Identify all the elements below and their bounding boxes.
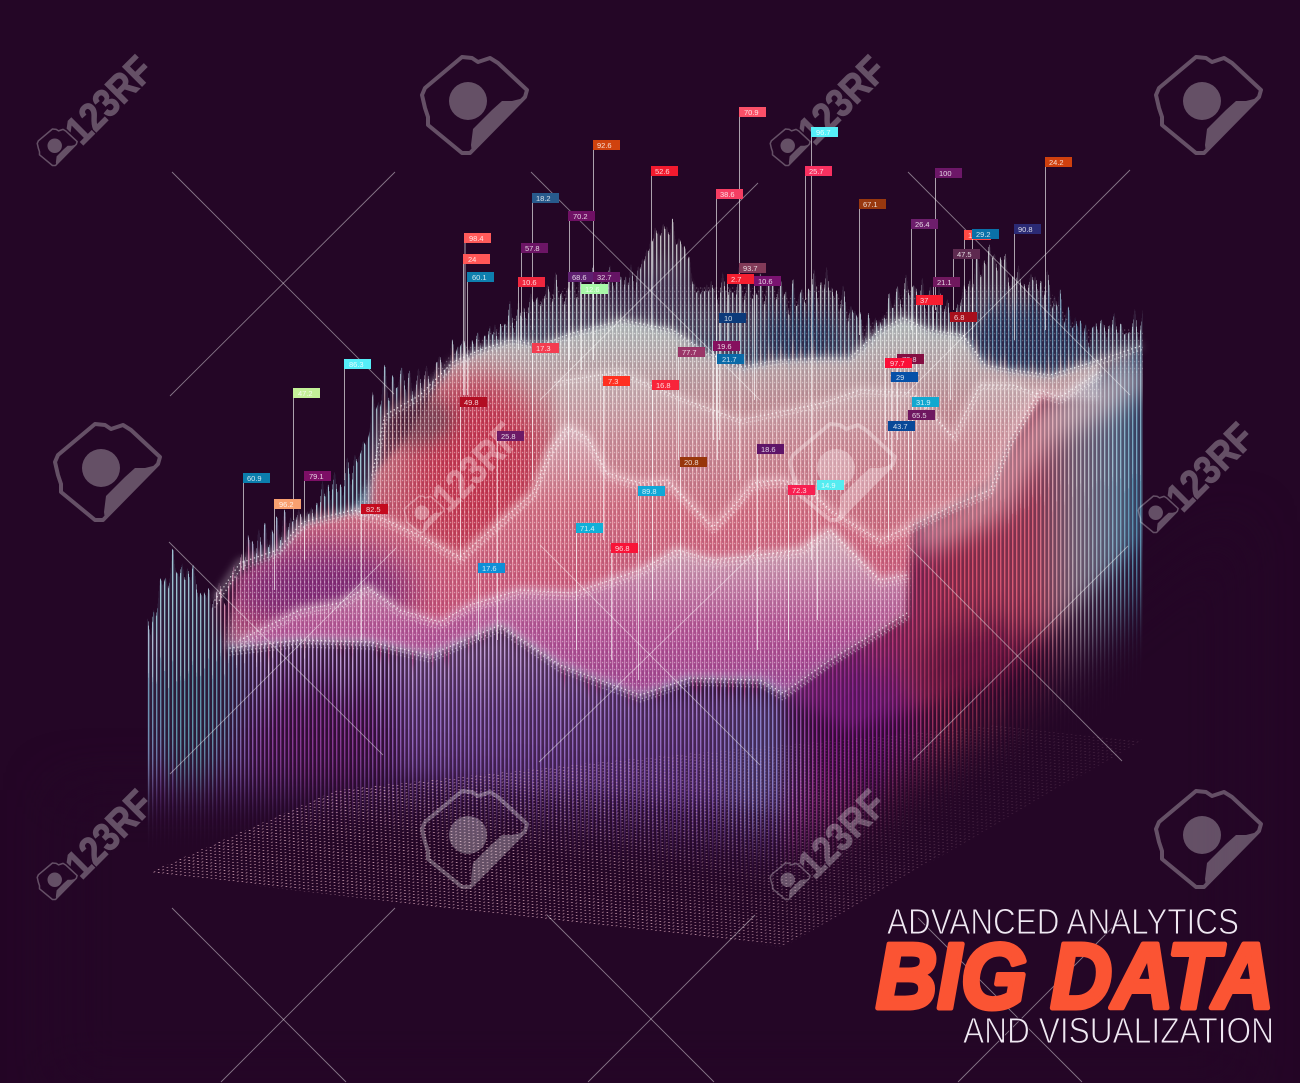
flag 38.6 (716, 189, 743, 420)
flag 29 (891, 372, 918, 470)
flag 97.7: 97.7 (890, 359, 905, 368)
watermark egg icon 5 (422, 791, 527, 887)
flag 20.8 (680, 457, 707, 600)
watermark text 2: 123RF (790, 48, 895, 153)
flag 90.8 (1014, 224, 1041, 340)
flag 93.7 (739, 263, 766, 273)
ridge highlights (215, 318, 1145, 702)
flag 18.6 (757, 444, 784, 650)
flag 57.8: 57.8 (525, 244, 540, 253)
flag 92.6: 92.6 (597, 141, 612, 150)
title: big data: BIG DATA (876, 924, 1274, 1028)
flag 89.8: 89.8 (642, 487, 657, 496)
flag 7.3: 7.3 (608, 377, 618, 386)
upper spike dots (430, 285, 1143, 375)
flag 25.8 (497, 431, 524, 640)
flag 67.1: 67.1 (863, 200, 878, 209)
flag 70.9 (739, 107, 766, 480)
flag 10.6 right: 10.6 (758, 277, 773, 286)
flag 65.5: 65.5 (912, 411, 927, 420)
watermark text 1 (37, 48, 162, 165)
flag 21.7: 21.7 (722, 355, 737, 364)
flag 60.1: 60.1 (472, 273, 487, 282)
flag 16.8: 16.8 (656, 381, 671, 390)
flag 77.7 (678, 347, 705, 460)
flag 60.9 (243, 473, 270, 570)
flag 78.8 (897, 354, 924, 440)
flag cyan lower: 14.9 (821, 481, 836, 490)
flag 32.7: 32.7 (597, 273, 612, 282)
flag 38.6: 38.6 (720, 190, 735, 199)
flag 100 (935, 168, 962, 310)
flag 43.7: 43.7 (893, 422, 908, 431)
flag cyan lower (817, 480, 844, 620)
flag 100: 100 (939, 169, 952, 178)
flag 10: 10 (724, 314, 732, 323)
flag 68.6 (568, 272, 595, 480)
watermark egg icon 2 (1156, 57, 1261, 153)
watermark text 3 (404, 415, 529, 532)
flag 29.2 (972, 229, 999, 340)
flag 26.4: 26.4 (915, 220, 930, 229)
title block (876, 901, 1274, 1051)
flag 89.8 (638, 486, 665, 680)
flag 37 (916, 295, 943, 380)
watermark egg icon 6 (1156, 791, 1261, 887)
flag 78.8: 78.8 (902, 355, 917, 364)
flag 93.7: 93.7 (743, 264, 758, 273)
flag 29: 29 (896, 373, 904, 382)
flag 43.7 (888, 421, 915, 540)
flag 19.6 (713, 341, 740, 440)
flag cyan top (811, 127, 838, 560)
watermark text 5: 123RF (57, 782, 162, 887)
flag 47.5: 47.5 (957, 250, 972, 259)
flag 70.2: 70.2 (573, 212, 588, 221)
fade to floor (60, 520, 1240, 1083)
flag 31.9: 31.9 (916, 398, 931, 407)
flag 16.8 (652, 380, 679, 600)
flag 71.4 (576, 523, 603, 650)
flag 10.6 left: 10.6 (522, 278, 537, 287)
flag 6.8 (950, 312, 977, 400)
flag 90.8: 90.8 (1018, 225, 1033, 234)
watermark text 5 (37, 782, 162, 899)
flag 98.4 (464, 233, 491, 395)
flag 65.5 (908, 410, 935, 500)
solid surface (222, 255, 1143, 812)
flag 17.6 (478, 563, 505, 640)
flag green: 12.6 (585, 285, 600, 294)
flag lime (293, 388, 320, 520)
flag 97.7 (885, 358, 912, 440)
flag orange: 96.2 (279, 500, 294, 509)
flag 72.3 (788, 485, 815, 640)
watermark text 4: 123RF (1158, 415, 1263, 520)
flag 10 (719, 313, 746, 440)
flag 10.6 right (754, 276, 781, 400)
flag 37: 37 (920, 296, 928, 305)
flag orange (274, 499, 301, 590)
flag 60.1 (467, 272, 494, 395)
flag 25.8: 25.8 (501, 432, 516, 441)
watermark egg icon 1 (422, 57, 527, 153)
flag 24.2 (1045, 157, 1072, 330)
watermark logos (37, 48, 1263, 899)
watermark egg icon 4 (790, 424, 895, 520)
flag 25.7 (805, 166, 832, 300)
flag 31.9 (912, 397, 939, 480)
flag 21.7 (717, 354, 744, 460)
flag 2.7 (727, 274, 754, 350)
flag 24 (463, 254, 490, 395)
flag green (581, 284, 608, 370)
data flags (243, 107, 1072, 680)
flag 2.7: 2.7 (731, 275, 741, 284)
flag 17: 17 (968, 231, 976, 240)
flag 49.8: 49.8 (464, 398, 479, 407)
flag 52.6 (651, 166, 678, 330)
flag 79.1 (304, 471, 331, 560)
flag 70.9: 70.9 (744, 108, 759, 117)
flag cyan upper left (344, 359, 371, 480)
flag 17 (964, 230, 991, 350)
flag 47.5 (953, 249, 980, 310)
striped spiky bars (147, 218, 1143, 878)
flag 18.2: 18.2 (536, 194, 551, 203)
crosshair diagonal lines (169, 170, 1130, 1082)
watermark text 1: 123RF (57, 48, 162, 153)
watermark text 2 (770, 48, 895, 165)
flag 82.5: 82.5 (366, 505, 381, 514)
flag 57.8 (521, 243, 548, 340)
flag 32.7 (593, 272, 620, 360)
watermark egg icon 3 (55, 424, 160, 520)
flag 7.3 (603, 376, 630, 540)
flag 72.3: 72.3 (792, 486, 807, 495)
flag 18.2 (532, 193, 559, 330)
flag 96.8: 96.8 (615, 544, 630, 553)
flag lime: 47.2 (298, 389, 313, 398)
soft glow on right face top edge (913, 370, 1143, 540)
flag 24.2: 24.2 (1049, 158, 1064, 167)
watermark text 6: 123RF (790, 782, 895, 887)
flag 25.7: 25.7 (809, 167, 824, 176)
flag 24: 24 (468, 255, 476, 264)
flag 68.6: 68.6 (572, 273, 587, 282)
flag cyan top: 96.7 (816, 128, 831, 137)
flag 71.4: 71.4 (580, 524, 595, 533)
flag 21.1: 21.1 (937, 278, 952, 287)
flag 10.6 left (518, 277, 545, 350)
flag 67.1 (859, 199, 886, 335)
watermark text 4 (1138, 415, 1263, 532)
flag 60.9: 60.9 (247, 474, 262, 483)
flag 18.6: 18.6 (761, 445, 776, 454)
flag 70.2 (568, 211, 595, 360)
watermark text 6 (770, 782, 895, 899)
watermark text 3: 123RF (424, 415, 529, 520)
flag 19.6: 19.6 (717, 342, 732, 351)
flag 52.6: 52.6 (655, 167, 670, 176)
flag 79.1: 79.1 (309, 472, 324, 481)
flag 21.1 (933, 277, 960, 330)
3D data landscape chart (147, 218, 1145, 878)
flag 17.3 (532, 343, 559, 480)
flag 29.2: 29.2 (976, 230, 991, 239)
flag 17.6: 17.6 (482, 564, 497, 573)
flag cyan upper left: 86.3 (349, 360, 364, 369)
surface vertical lines and dots (222, 319, 1103, 698)
flag 98.4: 98.4 (469, 234, 484, 243)
flag 6.8: 6.8 (954, 313, 964, 322)
flag 17.3: 17.3 (536, 344, 551, 353)
flag 96.8 (611, 543, 638, 660)
flag 20.8: 20.8 (684, 458, 699, 467)
flag 49.8 (460, 397, 487, 560)
title line: advanced analytics: ADVANCED ANALYTICS (887, 901, 1239, 942)
dotted floor grid (148, 725, 1143, 947)
flag 26.4 (911, 219, 938, 330)
flag 82.5 (361, 504, 388, 640)
flag 77.7: 77.7 (682, 348, 697, 357)
flag 92.6 (593, 140, 620, 300)
